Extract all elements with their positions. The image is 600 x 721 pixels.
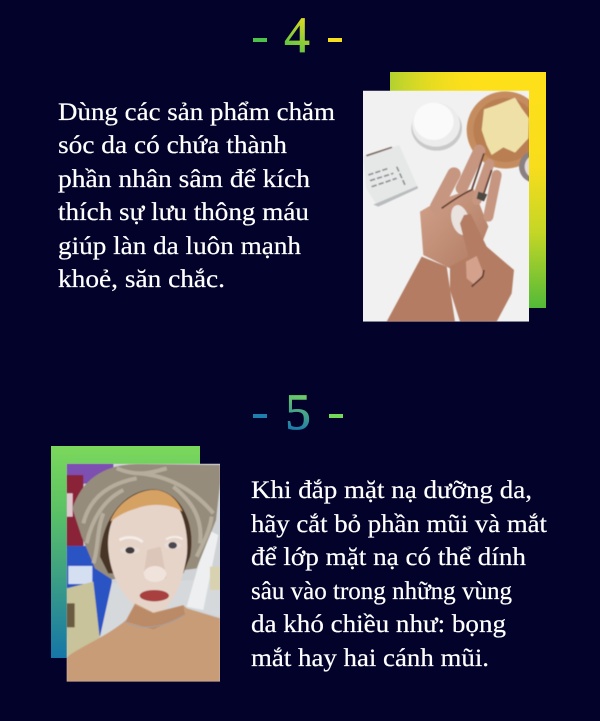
section 4 heading: 4 xyxy=(284,8,310,64)
photo: woman wearing face mask xyxy=(67,464,220,682)
section 4 text block xyxy=(58,97,335,293)
section 5 text block: Khi đắp mặt nạ dưỡng da, xyxy=(251,475,532,504)
section 4 text block: Dùng các sản phẩm chăm xyxy=(58,97,335,126)
gradient panel: yellow to green xyxy=(390,72,546,308)
section 4 text block: khoẻ, săn chắc. xyxy=(58,264,225,293)
section 5 text block: da khó chiều như: bọng xyxy=(251,609,506,638)
section 4 text block: giúp làn da luôn mạnh xyxy=(58,231,301,260)
section 5 text block: mắt hay hai cánh mũi. xyxy=(251,643,489,672)
section 5 heading: 5 xyxy=(285,385,311,441)
section 5 text block: để lớp mặt nạ có thể dính xyxy=(251,542,526,571)
section 5 text block xyxy=(251,475,547,672)
section 4 text block: sóc da có chứa thành xyxy=(58,130,287,159)
section 5 text block: hãy cắt bỏ phần mũi và mắt xyxy=(251,509,547,538)
section 4 text block: phần nhân sâm để kích xyxy=(58,164,310,193)
photo: hands applying cream xyxy=(363,90,529,322)
section 5 text block: sâu vào trong những vùng xyxy=(251,576,512,605)
section 4 heading xyxy=(253,8,342,64)
gradient panel: green to blue xyxy=(51,446,200,658)
section 5 heading xyxy=(253,385,343,441)
section 4 text block: thích sự lưu thông máu xyxy=(58,197,309,226)
